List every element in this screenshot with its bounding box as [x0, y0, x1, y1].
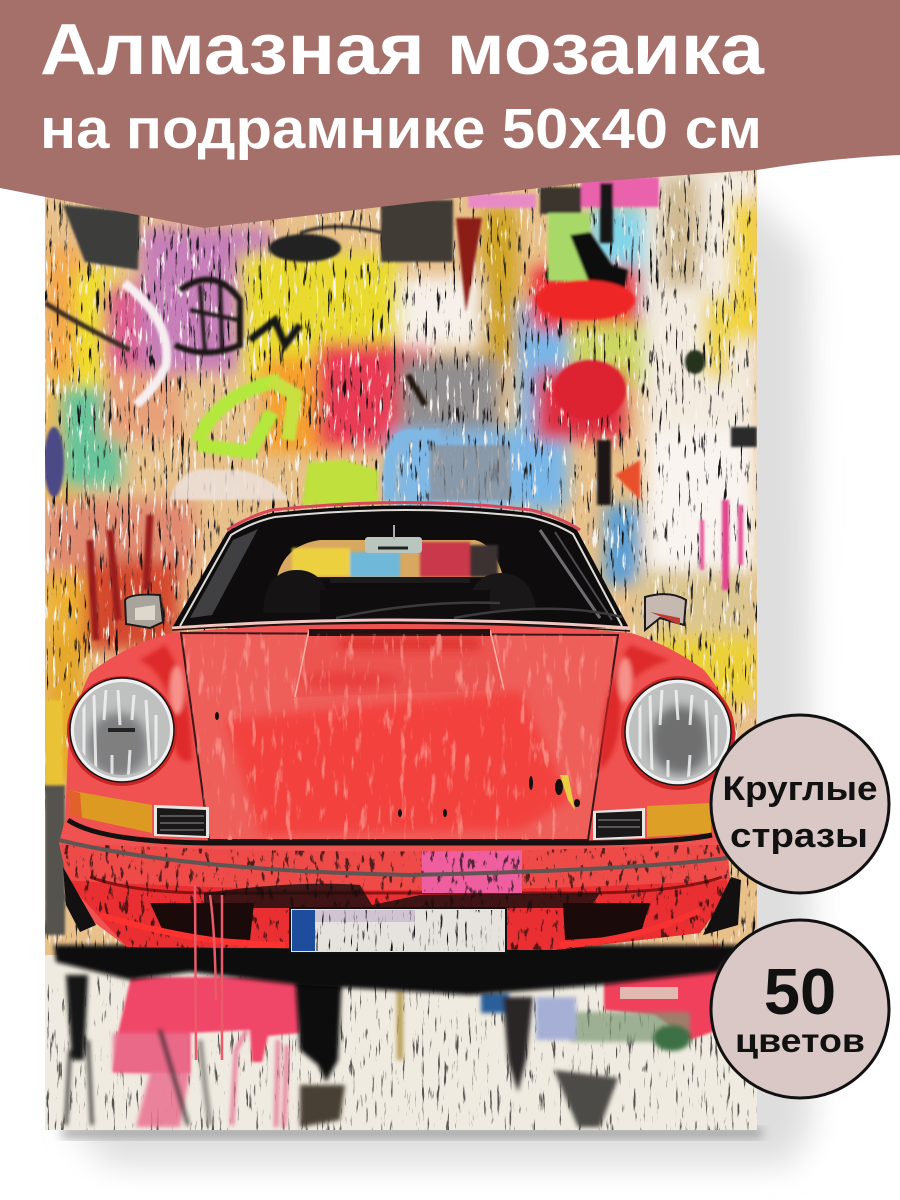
fender reflections — [140, 645, 670, 770]
badge: round rhinestones — [711, 715, 889, 893]
badge: round rhinestones: Круглые — [722, 770, 878, 808]
rear window view — [277, 540, 503, 577]
ground streaks — [45, 975, 757, 1130]
car — [59, 502, 741, 1060]
hood paint spots — [215, 712, 580, 817]
header band — [0, 0, 900, 228]
badge: 50 colours — [711, 920, 889, 1098]
badge: 50 colours: 50 — [764, 955, 836, 1028]
roof and windshield — [172, 506, 629, 628]
bumper — [59, 820, 741, 1060]
mirrors — [125, 594, 686, 630]
ground with paint drips — [45, 945, 757, 1130]
title: Алмазная мозаика — [40, 10, 765, 90]
indicators and grilles — [68, 790, 711, 840]
wall paint streaks — [45, 165, 757, 965]
pillar highlights — [190, 529, 258, 618]
wipers — [336, 603, 622, 618]
graffiti wall background — [44, 165, 757, 965]
wall white speckles — [45, 165, 757, 965]
wall sharp marks — [44, 177, 757, 935]
badge: round rhinestones: стразы — [730, 817, 868, 855]
right headlight — [621, 676, 735, 790]
hood — [181, 633, 618, 840]
body — [59, 622, 736, 950]
wheels — [63, 867, 96, 932]
left headlight — [67, 676, 177, 786]
rear view mirror — [365, 525, 422, 553]
paint drips from bumper — [195, 885, 222, 1060]
under-car black band — [54, 945, 740, 995]
subtitle: на подрамнике 50х40 см — [40, 97, 762, 161]
painting on canvas — [44, 165, 757, 1130]
license plate — [290, 908, 506, 953]
canvas shadow — [62, 190, 812, 1165]
badge: 50 colours: цветов — [735, 1022, 865, 1059]
seats — [277, 570, 318, 578]
